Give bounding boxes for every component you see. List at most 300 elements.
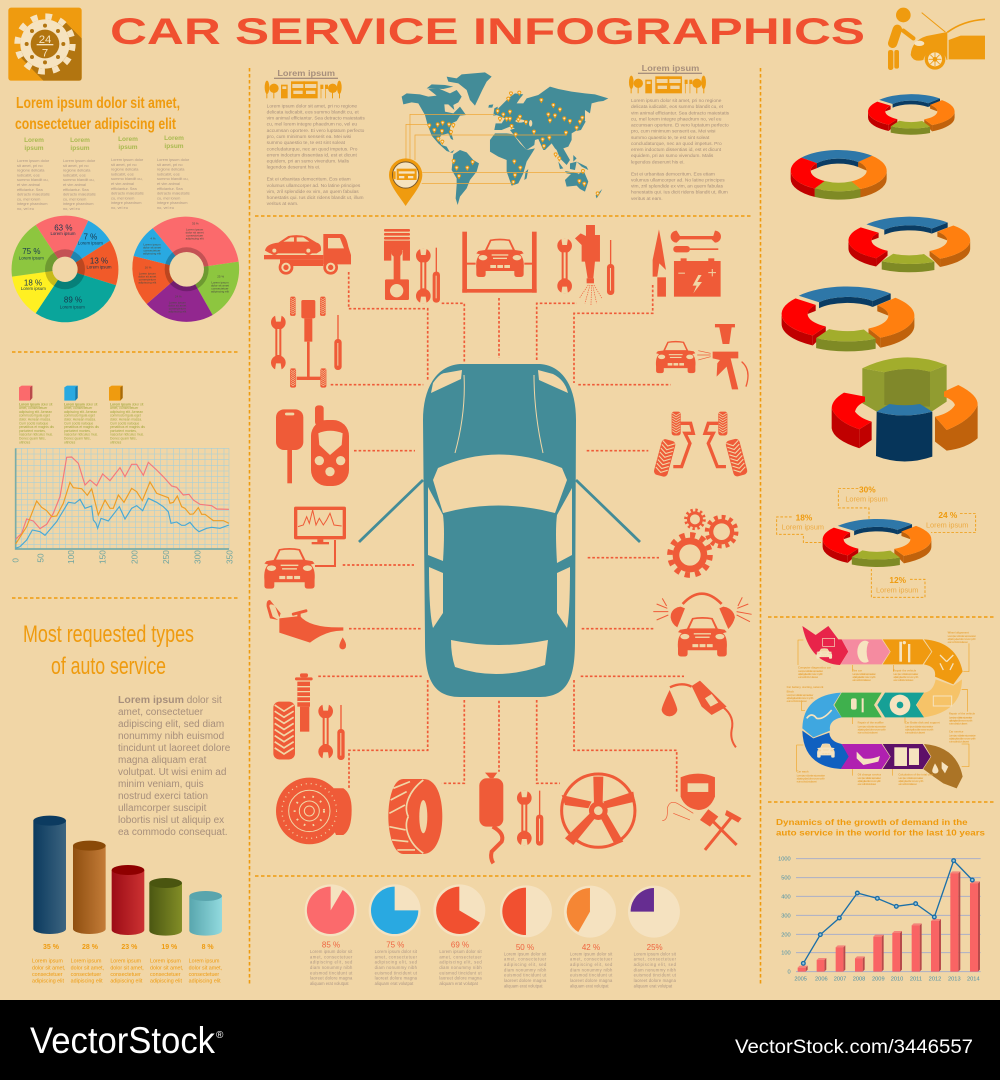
icons upper row group (264, 225, 748, 486)
pink line (16, 457, 229, 539)
pie chart 1: Lorem ipsum (78, 240, 103, 245)
legend: penatibus et magnis dis (64, 425, 99, 429)
captions: diam nonummy nibh (634, 967, 677, 972)
captions: Lorem ipsum (110, 959, 142, 965)
values: 35 % (43, 944, 60, 951)
icon: piston with tools (384, 229, 440, 303)
step captions: Car service (949, 730, 964, 734)
left text block: vim, zril splendide ex vim, an quem fabulas (267, 189, 359, 195)
icon: brake disc (276, 778, 352, 844)
values: 28 % (82, 944, 99, 951)
column 3: integre phaedrum (111, 200, 142, 205)
step captions: euismod tincidunt ut laoreet (858, 782, 876, 786)
pie chart 1: 89 % (64, 296, 82, 305)
icon: wheel alignment (653, 412, 748, 478)
pie chart 2: Lorem ipsum (143, 242, 161, 246)
x labels: 2013 (948, 977, 961, 983)
captions: dolor sit amet, (32, 965, 65, 971)
pie chart 1: Lorem ipsum (86, 265, 112, 270)
column 4: efficiantur. Sea (157, 186, 184, 191)
connection lines (406, 114, 583, 184)
pie chart 2: 25 % (217, 275, 224, 279)
pie chart 1: Lorem ipsum (21, 286, 46, 291)
captions: diam nonummy nibh (375, 965, 418, 970)
left text block: pro, cum minimum senserit ea. Mei wisi (267, 134, 351, 140)
chart title: auto service in the world for the last 10 years (776, 828, 985, 838)
column 1: Lorem (24, 137, 44, 144)
captions: adipiscing elit, sed (439, 960, 482, 965)
left text block: concludaturque, nec an quod impetus. Pro (267, 146, 358, 152)
step captions: Car wash (797, 770, 809, 774)
column 3: summo blandit cu, (111, 176, 143, 181)
right text block: veritus at eam. (631, 196, 663, 202)
grid and y labels: 500 (781, 876, 791, 882)
captions: consectetuer (150, 972, 181, 978)
legend: Donec quam felis, (64, 437, 91, 441)
pie chart 2 (132, 217, 239, 322)
legend: commodo ligula eget (64, 414, 95, 418)
axis labels: 350 (224, 550, 234, 564)
icon: tire (388, 779, 442, 854)
captions: euismod tincidunt ut (634, 973, 677, 978)
step captions: adipiscing elit, sed diam nonummy nibh (797, 776, 826, 780)
column 4: integre phaedrum (157, 200, 188, 205)
column 1: ipsum (24, 145, 44, 152)
pie chart 2: adipiscing elit (186, 236, 204, 240)
column 2: sit amet, pri no (63, 163, 89, 168)
service icons (264, 225, 752, 863)
legend: Cum sociis natoque (19, 421, 48, 425)
icon: 24/7 gear badge: 24 (39, 34, 51, 46)
pie chart 1: 63 % (54, 224, 72, 233)
footer bar (0, 1000, 1000, 1080)
captions: adipiscing elit, sed (504, 962, 547, 967)
column 1: no, vel eu (17, 206, 34, 211)
icon: car key (276, 409, 303, 483)
icon: headphones car (653, 594, 752, 656)
captions: laoreet dolore magna (570, 978, 613, 983)
captions: adipiscing elit (32, 979, 65, 985)
legend: ultricies (110, 440, 122, 444)
captions: consectetuer (32, 972, 63, 978)
pie chart 2: Lorem ipsum (169, 301, 186, 305)
captions: amet, consectetuer (634, 957, 677, 962)
values (43, 944, 214, 951)
legend: amet, consectetuer (64, 406, 93, 410)
captions: adipiscing elit, sed (375, 960, 418, 965)
captions: dolor sit amet, (110, 965, 144, 971)
captions: Lorem ipsum dolor sit (439, 949, 482, 954)
paragraph: nostrud exerci tation (118, 791, 208, 802)
column 2: no, vel eu (63, 206, 80, 211)
pie chart 2: dolor sit amet (138, 274, 156, 278)
column 2: efficiantur. Sea (63, 187, 90, 192)
column 1: cu, mel lorem (17, 196, 40, 201)
left text block: legendos deserunt his ei. (267, 165, 320, 171)
world map panel (265, 64, 730, 207)
legend: Lorem ipsum (64, 402, 85, 406)
paragraph: tincidunt ut laoreet dolore (118, 743, 231, 754)
grid and y labels: 0 (788, 970, 791, 976)
step captions: adipiscing elit, sed diam nonummy nibh (905, 727, 934, 731)
pie chart 2: adipiscing elit (168, 310, 186, 314)
values: 8 % (202, 944, 214, 951)
paragraph: Lorem ipsum (118, 694, 184, 706)
grid and y labels: 200 (781, 932, 791, 938)
legend: dolor sit (85, 402, 98, 406)
icon: muffler (479, 773, 543, 863)
column 1: iudicabit, eos (17, 172, 40, 177)
percent values: 25% (647, 943, 663, 952)
legend: Cum sociis natoque (110, 421, 139, 425)
x labels: 2009 (872, 977, 885, 983)
legend: dolor sit (40, 402, 53, 406)
right text block: summo quaestio te, te est sint soleat (631, 135, 710, 141)
captions: euismod tincidunt ut (439, 970, 482, 975)
paragraph: minim veniam, quis (118, 779, 204, 790)
demand dynamics chart (776, 817, 985, 983)
axis labels: 0 (11, 558, 21, 563)
step captions: adipiscing elit, sed diam nonummy nibh (949, 736, 976, 740)
pie chart 2: dolor sit amet (168, 304, 186, 308)
ring 6 with labels: Lorem ipsum (926, 521, 968, 530)
right text block: errem indoctum dissentias id, est et dicunt (631, 147, 722, 153)
right text block: legendos deserunt his ei. (631, 159, 685, 165)
step captions: Computer diagnostics car (798, 665, 831, 669)
legend: adipiscing elit. Aenean (64, 410, 97, 414)
legend: adipiscing elit. Aenean (110, 410, 143, 414)
legend: nascetur ridiculus mus. (110, 433, 144, 437)
pie chart 2: 24 % (175, 295, 182, 299)
step captions: euismod tincidunt ut laoreet (858, 730, 878, 734)
right text block: volumus ullamcorper ad. No latine principes (631, 177, 725, 183)
step captions: Lorem ipsum dolor sit amet, consectetuer (949, 715, 973, 719)
legend: commodo ligula eget (19, 414, 50, 418)
right text block: vim animal efficiantur. Sea detracto maiestatis (631, 110, 730, 116)
column 2: iudicabit, eos (63, 172, 86, 177)
legend: adipiscing elit. Aenean (19, 410, 52, 414)
column 2: detracto maiestatis (63, 192, 96, 197)
step captions: Lorem ipsum dolor sit amet, consectetuer (905, 724, 933, 728)
icon: 24/7 gear badge (8, 8, 82, 81)
step captions: Lorem ipsum dolor sit amet, consectetuer (949, 733, 976, 737)
icon: car lift (462, 232, 537, 293)
grid and y labels: 1000 (778, 857, 791, 863)
ring 6 with labels: 18% (796, 512, 813, 522)
pie chart 2: consectetuer (186, 233, 203, 237)
captions (310, 949, 677, 988)
legend: amet, consectetuer (110, 406, 139, 410)
four text columns (17, 135, 190, 211)
captions: aliquam erat volutpat (504, 983, 543, 988)
step captions: euismod tincidunt ut laoreet (797, 779, 817, 783)
captions: adipiscing elit, sed (634, 962, 677, 967)
captions (32, 959, 222, 985)
captions: amet, consectetuer (310, 954, 353, 959)
step captions: adipiscing elit, sed diam nonummy nibh (948, 637, 976, 641)
step captions: adipiscing elit, sed diam nonummy nibh (852, 675, 876, 679)
pie chart 2: 35 % (192, 221, 199, 225)
footer bar: ® (216, 1030, 224, 1041)
paragraph: lobortis nisl ut aliquip ex (118, 815, 224, 826)
column 2: Lorem (70, 137, 90, 144)
left heading: consectetuer adipiscing elit (15, 116, 177, 133)
captions: amet, consectetuer (570, 957, 613, 962)
right text block: Lorem ipsum (642, 64, 699, 73)
pie 25 percent (631, 888, 654, 912)
captions: euismod tincidunt ut (570, 973, 613, 978)
icon: axle and tools (271, 297, 342, 388)
legend: nascetur ridiculus mus. (19, 433, 53, 437)
captions: laoreet dolore magna (634, 978, 677, 983)
axis labels: 100 (66, 550, 76, 564)
line series (801, 859, 974, 965)
column 1: detracto maiestatis (17, 192, 50, 197)
captions: Lorem ipsum dolor sit (310, 949, 353, 954)
captions: Lorem ipsum (32, 959, 63, 965)
column 1: regione delicata (17, 168, 45, 173)
captions: adipiscing elit (150, 979, 182, 985)
captions: diam nonummy nibh (570, 967, 613, 972)
paragraph: volutpat. Ut wisi enim ad (118, 767, 226, 778)
paragraph: ullamcorper suscipit (118, 803, 207, 814)
step captions: euismod tincidunt ut laoreet (949, 739, 969, 743)
chart title (776, 817, 985, 838)
pie chart 2: adipiscing elit (138, 280, 156, 284)
x labels: 2008 (853, 977, 865, 983)
pie chart 2: dolor sit amet (186, 230, 204, 234)
step captions: euismod tincidunt ut laoreet (852, 678, 871, 682)
legend: penatibus et magnis dis (19, 425, 54, 429)
icon: gears (670, 510, 736, 575)
captions: adipiscing elit (110, 979, 143, 985)
column 2: Lorem ipsum dolor (63, 158, 96, 163)
column 3: no, vel eu (111, 205, 128, 210)
step captions: Lorem ipsum dolor sit amet, consectetuer (898, 776, 924, 780)
axis labels: 50 (35, 553, 45, 563)
location markers (427, 91, 600, 197)
right text block: pro, cum minimum senserit ea. Mei wisi (631, 129, 715, 135)
pie 75 percent (371, 887, 418, 934)
right text block: cu, mel lorem integre phaedrum no, vel eu (631, 116, 722, 122)
icons lower group (264, 507, 752, 863)
percent values: 69 % (451, 941, 469, 950)
column 2: regione delicata (63, 168, 91, 173)
column 4: ipsum (164, 143, 184, 150)
column 2: et vim animal (63, 182, 86, 187)
paragraph: dolor sit (184, 695, 222, 706)
column 1: efficiantur. Sea (17, 187, 44, 192)
grid and y labels (778, 857, 981, 976)
line chart with legend (11, 386, 234, 564)
x labels: 2006 (815, 977, 828, 983)
dotted connectors (318, 272, 684, 792)
legend (19, 386, 145, 444)
right text block: delicata iudicabit, eos summo blandit cu, et (631, 104, 724, 110)
column 1: sit amet, pri no (17, 163, 43, 168)
x labels: 2010 (891, 977, 903, 983)
column 3: iudicabit, eos (111, 171, 134, 176)
pie 69 percent (436, 887, 480, 934)
step captions: Lorem ipsum dolor sit amet, consectetuer (852, 672, 876, 676)
paragraph: amet, consectetuer (118, 707, 204, 718)
right text block: honestatis qui. Ius dicit ridens blandit ut, illum (631, 190, 728, 196)
captions: aliquam erat volutpat (439, 981, 479, 986)
connectors (797, 640, 969, 776)
captions: laoreet dolore magna (504, 978, 547, 983)
step captions: euismod tincidunt ut laoreet (898, 782, 917, 786)
step captions: Tire car (852, 668, 862, 672)
paragraph: nonummy nibh euismod (118, 731, 224, 742)
pie 50 percent (502, 888, 526, 935)
axis labels: 300 (193, 550, 203, 564)
right text block: equidem, pri an sumo vivendum. Malis (631, 153, 714, 159)
grid and y labels: 100 (781, 951, 791, 957)
step captions: Car Brake disk and support (905, 721, 940, 725)
x labels: 2012 (929, 977, 941, 983)
captions: Lorem ipsum (150, 959, 181, 965)
captions: diam nonummy nibh (439, 965, 482, 970)
pie chart 1: 13 % (90, 256, 108, 265)
heading: most requested types (23, 621, 194, 680)
captions: adipiscing elit, sed (310, 960, 353, 965)
captions: aliquam erat volutpat (570, 983, 609, 988)
cylinder bar chart (32, 816, 222, 985)
right text block (629, 64, 730, 202)
pie chart 1: Lorem ipsum (19, 256, 44, 261)
column 3: ipsum (118, 144, 138, 151)
percent values: 42 % (582, 943, 600, 952)
ring 6 with labels: Lorem ipsum (782, 523, 824, 532)
left text block: Lorem ipsum (277, 69, 335, 78)
right text block: concludaturque, nec an quod impetus. Pro (631, 141, 722, 147)
column 4: Lorem ipsum dolor (157, 157, 190, 162)
left text block: accumsan oportere. Ei vero luptatum perfecto (267, 128, 365, 134)
right text block: Lorem ipsum dolor sit amet, pri no regione (631, 98, 722, 104)
captions: euismod tincidunt ut (375, 970, 418, 975)
step captions: euismod tincidunt ut laoreet (905, 730, 925, 734)
column 1: et vim animal (17, 182, 40, 187)
icon: welding mask and hammers (662, 774, 742, 850)
left text block: equidem, pri an sumo vivendum. Malis (267, 159, 350, 165)
captions: diam nonummy nibh (310, 965, 353, 970)
left text block: errem indoctum dissentias id, est et dicunt (267, 152, 357, 158)
x labels: 2014 (967, 977, 980, 983)
axis labels (11, 550, 234, 564)
step captions: Car battery, starting, network (787, 685, 824, 689)
legend: ultricies (19, 440, 31, 444)
big pin (389, 158, 422, 206)
pie chart 2: 4 % (150, 236, 156, 240)
legend: penatibus et magnis dis (110, 425, 145, 429)
column 2: integre phaedrum (63, 201, 94, 206)
left text block: Est ei urbanitas democritum. Eos etiam (267, 177, 351, 183)
step captions: Lorem ipsum dolor sit amet, consectetuer (798, 669, 823, 673)
axis labels: 150 (98, 550, 108, 564)
x labels: 2005 (794, 977, 807, 983)
step captions: Lorem ipsum dolor sit amet, consectetuer (858, 776, 881, 780)
captions: Lorem ipsum dolor sit (634, 951, 677, 956)
map (402, 72, 608, 205)
left text block: summo quaestio te, te est sint soleat (267, 140, 346, 146)
legend: commodo ligula eget (110, 414, 141, 418)
step captions: adipiscing elit, sed diam nonummy nibh (858, 727, 887, 731)
x labels: 2007 (834, 977, 846, 983)
column 1: Lorem ipsum dolor (17, 158, 50, 163)
captions: adipiscing elit (71, 979, 103, 985)
captions: consectetuer (189, 972, 219, 978)
captions: amet, consectetuer (439, 954, 482, 959)
left text block: cu, mel lorem integre phaedrum no, vel eu (267, 122, 357, 128)
legend: Lorem ipsum (110, 402, 131, 406)
legend: Donec quam felis, (110, 437, 137, 441)
pie chart 2: 16 % (145, 265, 152, 269)
column 4: Lorem (164, 135, 184, 142)
legend: dolor. Aenean massa. (110, 418, 142, 422)
captions: dolor sit amet, (189, 965, 222, 971)
legend: parturient montes, (110, 429, 137, 433)
captions: consectetuer (110, 972, 141, 978)
column 1 (17, 137, 50, 211)
left text block: honestatis qui. Ius dicit ridens blandit ut, illum (267, 195, 364, 201)
paragraph: adipiscing elit, sed diam (118, 719, 224, 730)
column 2: ipsum (70, 145, 90, 152)
ring 6 with labels: Lorem ipsum (845, 494, 888, 503)
icon: tow truck (264, 234, 351, 275)
title: CAR SERVICE INFOGRAPHICS (110, 11, 865, 52)
pie chart 2: adipiscing elit (211, 290, 229, 294)
pie chart 2: Lorem ipsum (139, 271, 156, 275)
column 2: cu, mel lorem (63, 196, 86, 201)
pie chart 1: 7 % (83, 233, 97, 242)
paragraph: magna aliquam erat (118, 755, 207, 766)
icon: 24/7 gear badge: 7 (42, 48, 48, 60)
pie chart 1: 75 % (22, 247, 40, 256)
snake process timeline (787, 626, 976, 788)
left text block: delicata iudicabit, eos summo blandit cu, et (267, 109, 359, 115)
ring 6 with labels: 30% (859, 484, 876, 494)
pie chart 2: consectetuer (143, 248, 161, 252)
percent values (322, 941, 663, 952)
column 3: efficiantur. Sea (111, 186, 138, 191)
column 3: regione delicata (111, 167, 139, 172)
step captions (787, 630, 976, 786)
right text block: Est ei urbanitas democritum. Eos etiam (631, 171, 715, 177)
x labels (794, 977, 980, 983)
legend: Cum sociis natoque (64, 421, 93, 425)
pie chart 2: Lorem ipsum (186, 227, 204, 231)
values: 23 % (121, 944, 138, 951)
grid and y labels: 300 (781, 913, 791, 919)
left text block: Lorem ipsum dolor sit amet, pri no regione (267, 103, 357, 109)
percent values: 50 % (516, 943, 534, 952)
icon: alloy wheel (562, 774, 635, 847)
icon: fuel injector (557, 225, 614, 305)
legend: Lorem ipsum (19, 402, 40, 406)
column 4: regione delicata (157, 167, 185, 172)
heading: most requested types: Most requested types (23, 621, 194, 648)
pie chart 2: consectetuer (139, 277, 156, 281)
right text block: vim, zril splendide ex vim, an quem fabulas (631, 184, 724, 190)
orange line (16, 482, 229, 544)
bars (798, 871, 980, 972)
right text block: accumsan oportere. Ei vero luptatum perfecto (631, 123, 729, 129)
column 3: sit amet, pri no (111, 162, 137, 167)
step captions: Wheel alignment (948, 630, 969, 634)
axis labels: 200 (129, 550, 139, 564)
captions: diam nonummy nibh (504, 967, 547, 972)
pie chart 2: dolor sit amet (211, 284, 229, 288)
